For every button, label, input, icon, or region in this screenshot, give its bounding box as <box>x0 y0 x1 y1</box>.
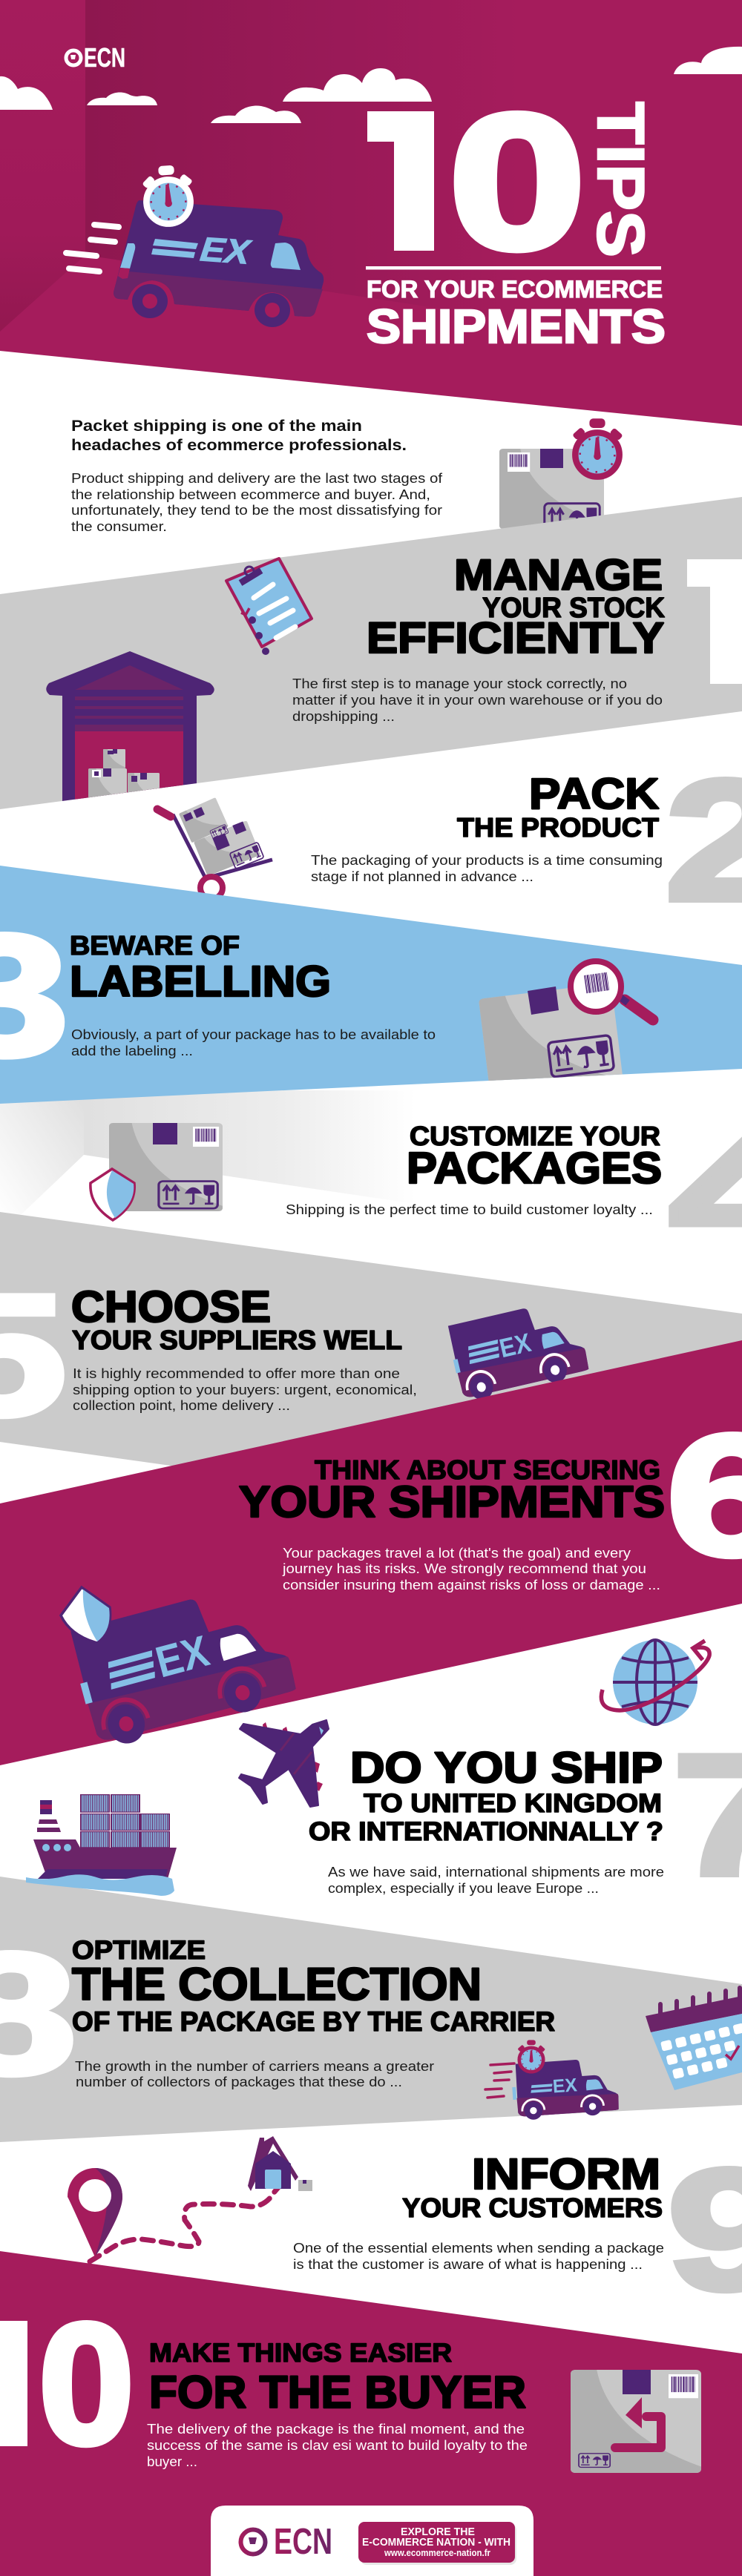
icon: hand truck with parcels <box>157 797 272 899</box>
footer logo: ECN <box>274 2522 332 2562</box>
icon: truck with shield <box>61 1578 300 1752</box>
icon: delivery truck: EX <box>496 1328 534 1364</box>
body text: tip 7: complex, especially if you leave Europe ... <box>328 1881 599 1896</box>
heading: tip 1: EFFICIENTLY <box>367 614 664 662</box>
intro body text: the relationship between ecommerce and buyer. And, <box>71 487 430 502</box>
room background behind tip 4 <box>0 1090 416 1216</box>
body text: tip 6: consider insuring them against risks of loss or damage ... <box>283 1578 660 1592</box>
panel: tip 5 band <box>0 1212 742 1545</box>
title rule <box>366 266 661 270</box>
heading: tip 5: CHOOSE <box>71 1282 271 1331</box>
icon: warehouse <box>46 651 214 816</box>
heading: tip 2 <box>457 770 659 843</box>
heading: tip 10: FOR THE BUYER <box>149 2367 526 2417</box>
panel: tip 1 band <box>0 497 742 809</box>
body text: tip 5: It is highly recommended to offer more than one <box>73 1366 400 1381</box>
icon: truck with stopwatch: EX <box>552 2075 578 2098</box>
body text: tip 5 <box>73 1366 417 1413</box>
body text: tip 1: The first step is to manage your stock correctly, no <box>292 676 627 691</box>
intro heading: Packet shipping is one of the main <box>71 418 362 435</box>
icon: clipboard <box>226 559 312 655</box>
header truck illustration: EX <box>195 230 256 271</box>
title: for your ecommerce: FOR YOUR ECOMMERCE <box>367 276 663 303</box>
header truck illustration <box>66 164 324 327</box>
heading: tip 3: BEWARE OF <box>70 930 240 961</box>
heading: tip 8: OPTIMIZE <box>72 1936 206 1965</box>
clouds <box>0 47 742 123</box>
panel: tip 10 band <box>0 2251 742 2576</box>
panel: tip 8 band <box>0 1877 742 2142</box>
heading: tip 7: TO UNITED KINGDOM <box>364 1789 662 1818</box>
intro body text: Product shipping and delivery are the last two stages of <box>71 471 443 486</box>
heading: tip 9: INFORM <box>472 2150 660 2198</box>
heading: tip 5: YOUR SUPPLIERS WELL <box>72 1325 402 1355</box>
body text: tip 10 <box>147 2422 528 2469</box>
title: shipments: SHIPMENTS <box>367 300 666 353</box>
body text: tip 9: One of the essential elements when sending a package <box>293 2241 664 2256</box>
heading: tip 6: YOUR SHIPMENTS <box>239 1478 665 1526</box>
body text: tip 10: success of the same is clav esi want to build loyalty to the <box>147 2438 528 2453</box>
heading: tip 4: PACKAGES <box>407 1144 662 1193</box>
call to action button: www.ecommerce-nation.fr <box>384 2548 490 2558</box>
body text: tip 3: Obviously, a part of your package has to be available to <box>71 1027 436 1042</box>
heading: tip 5 <box>71 1282 402 1355</box>
heading: tip 1: MANAGE <box>454 551 663 599</box>
heading: tip 9: YOUR CUSTOMERS <box>402 2193 663 2223</box>
icon: house with parcel <box>248 2136 312 2191</box>
body text: tip 10: The delivery of the package is the final moment, and the <box>147 2422 525 2437</box>
number 10: 0 <box>39 2288 134 2480</box>
heading: tip 8 <box>72 1936 555 2037</box>
body text: tip 4: Shipping is the perfect time to build customer loyalty ... <box>286 1202 653 1217</box>
icon: delivery truck <box>445 1297 591 1404</box>
title: 10: 1 <box>349 73 460 293</box>
icon: location pin with dashed route <box>68 2168 279 2262</box>
intro heading <box>71 418 407 454</box>
heading: tip 2: THE PRODUCT <box>457 812 659 843</box>
body text: tip 8: number of collectors of packages that these do ... <box>76 2075 402 2089</box>
icon: calendar <box>646 1988 742 2090</box>
body text: tip 6: journey has its risks. We strongly recommend that you <box>282 1561 646 1576</box>
body text: tip 7 <box>328 1865 664 1896</box>
header background <box>0 0 742 426</box>
heading: tip 4: CUSTOMIZE YOUR <box>410 1121 660 1151</box>
title: 10 <box>367 110 580 254</box>
heading: tip 1 <box>367 551 666 662</box>
panel: tip 6 band <box>0 1340 742 1765</box>
icon: parcel with magnifier <box>479 958 659 1081</box>
icon: container ship <box>26 1794 177 1896</box>
panel: tip 3 band <box>0 866 742 1104</box>
body text: tip 2: The packaging of your products is a time consuming <box>311 853 663 868</box>
heading: tip 6: THINK ABOUT SECURING <box>315 1455 660 1485</box>
heading: tip 1: YOUR STOCK <box>482 593 666 624</box>
body text: tip 6 <box>282 1546 660 1592</box>
heading: tip 7: DO YOU SHIP <box>350 1744 663 1792</box>
body text: tip 8: The growth in the number of carriers means a greater <box>75 2059 434 2074</box>
call to action button: EXPLORE THE <box>401 2526 475 2538</box>
heading: tip 9 <box>402 2150 663 2223</box>
heading: tip 6 <box>239 1455 665 1526</box>
icon: airplane <box>239 1720 329 1807</box>
number 10 <box>0 2320 131 2448</box>
body text: tip 8 <box>75 2059 434 2089</box>
heading: tip 10 <box>149 2339 526 2417</box>
heading: tip 3 <box>70 930 331 1006</box>
heading: tip 4 <box>407 1121 662 1193</box>
intro body text <box>71 471 443 534</box>
body text: tip 6: Your packages travel a lot (that's the goal) and every <box>283 1546 631 1561</box>
body text: tip 5: shipping option to your buyers: urgent, economical, <box>73 1383 417 1397</box>
body text: tip 2 <box>311 853 663 884</box>
call to action button: E-COMMERCE NATION - WITH <box>362 2537 510 2549</box>
body text: tip 1: dropshipping ... <box>292 709 395 724</box>
body text: tip 2: stage if not planned in advance ... <box>311 869 533 884</box>
intro body text: the consumer. <box>71 519 167 534</box>
body text: tip 9: is that the customer is aware of what is happening ... <box>293 2257 643 2272</box>
body text: tip 3 <box>71 1027 436 1058</box>
title: 10: 0 <box>449 74 585 289</box>
heading: tip 8: OF THE PACKAGE BY THE CARRIER <box>72 2006 555 2037</box>
icon: parcel with stopwatch <box>499 418 623 534</box>
body text: tip 7: As we have said, international shipments are more <box>328 1865 664 1880</box>
heading: tip 10: MAKE THINGS EASIER <box>149 2339 452 2368</box>
heading: tip 8: THE COLLECTION <box>72 1959 482 2009</box>
intro heading: headaches of ecommerce professionals. <box>71 437 407 454</box>
body text: tip 3: add the labeling ... <box>71 1044 193 1058</box>
body text: tip 9 <box>293 2241 664 2272</box>
heading: tip 3: LABELLING <box>70 958 331 1006</box>
logo: ECN <box>66 42 125 73</box>
heading: tip 2: PACK <box>529 770 659 818</box>
icon: return parcel <box>571 2370 701 2473</box>
body text: tip 1: matter if you have it in your own warehouse or if you do <box>292 693 663 708</box>
icon: truck with shield: EX <box>151 1627 214 1687</box>
footer logo <box>240 2522 332 2562</box>
icon: truck with stopwatch <box>485 2040 620 2121</box>
logo: ECN: ECN <box>84 42 125 73</box>
call to action button <box>358 2522 516 2565</box>
body text: tip 10: buyer ... <box>147 2454 197 2469</box>
footer panel <box>211 2506 533 2576</box>
title: TIPS: TIPS <box>584 102 658 257</box>
icon: globe with arrow <box>601 1640 709 1725</box>
heading: tip 7 <box>309 1744 663 1846</box>
body text: tip 1 <box>292 676 663 724</box>
icon: parcel with shield <box>91 1123 223 1220</box>
heading: tip 7: OR INTERNATIONNALLY ? <box>309 1817 663 1846</box>
intro body text: unfortunately, they tend to be the most dissatisfying for <box>71 503 442 518</box>
body text: tip 5: collection point, home delivery ... <box>73 1398 290 1413</box>
